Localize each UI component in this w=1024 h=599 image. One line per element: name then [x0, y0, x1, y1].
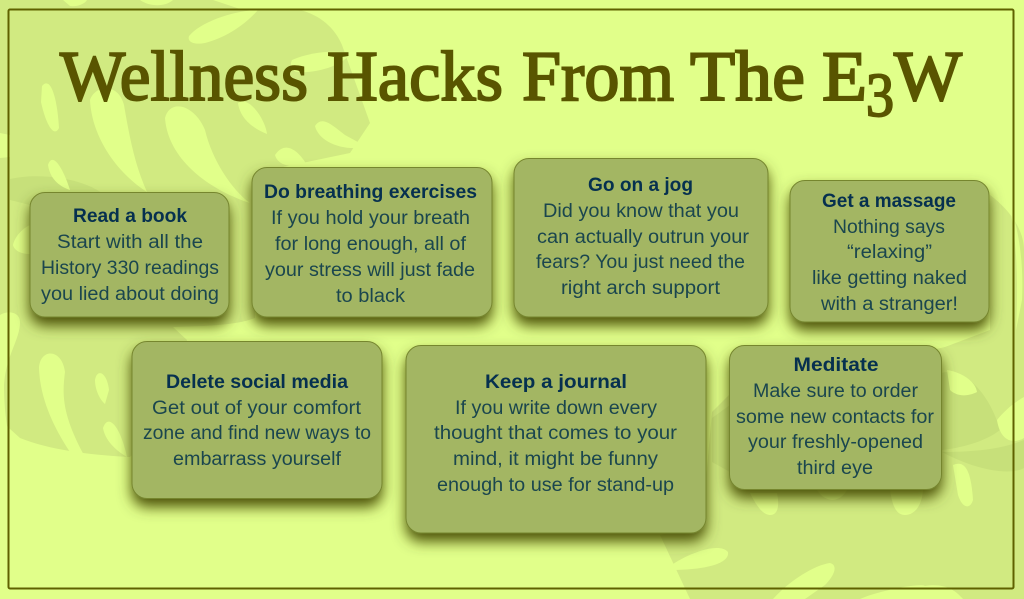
panel: go on a jog: [514, 158, 768, 317]
panel: do breathing exercises: to black: [336, 286, 406, 307]
panel: delete social media: zone and find new ways to: [143, 423, 371, 444]
panel: do breathing exercises: [252, 168, 492, 317]
panel: get a massage: like getting naked: [812, 268, 967, 289]
panel: go on a jog: fears? You just need the: [536, 252, 745, 273]
panel: get a massage: with a stranger!: [820, 294, 958, 315]
panel: go on a jog: right arch support: [561, 278, 721, 299]
title: Hacks: [327, 38, 503, 116]
title: [60, 38, 962, 130]
panel: read a book: [30, 192, 229, 317]
panel: keep a journal: thought that comes to your: [434, 423, 678, 444]
panel: read a book: you lied about doing: [41, 284, 219, 305]
panel: meditate: some new contacts for: [736, 407, 935, 428]
panel: do breathing exercises: If you hold your breath: [271, 208, 470, 229]
panel: delete social media: Get out of your comfort: [152, 398, 362, 419]
panel: get a massage: “relaxing”: [847, 242, 932, 263]
panel: delete social media: [132, 342, 382, 498]
panel: meditate: Make sure to order: [753, 381, 919, 402]
panel: read a book: Start with all the: [57, 232, 203, 253]
panel: meditate: your freshly-opened: [748, 432, 923, 453]
panel: delete social media: Delete social media: [166, 372, 348, 393]
panel: meditate: [730, 346, 942, 490]
panel: get a massage: [790, 180, 989, 322]
title: Wellness: [60, 38, 308, 116]
panel: read a book: Read a book: [73, 206, 187, 227]
panel: go on a jog: Did you know that you: [543, 201, 739, 222]
title: The: [690, 38, 805, 116]
panel: go on a jog: Go on a jog: [588, 175, 693, 196]
panel: keep a journal: mind, it might be funny: [453, 449, 659, 470]
panel: keep a journal: enough to use for stand-up: [437, 475, 674, 496]
panel: keep a journal: Keep a journal: [485, 372, 627, 393]
panel: read a book: History 330 readings: [41, 258, 219, 279]
panel: do breathing exercises: your stress will just fade: [265, 260, 475, 281]
panel: do breathing exercises: Do breathing exercises: [264, 182, 477, 203]
panel: delete social media: embarrass yourself: [173, 449, 342, 470]
panel: keep a journal: If you write down every: [455, 398, 658, 419]
panel: get a massage: Get a massage: [822, 191, 956, 212]
title: E: [822, 38, 867, 116]
panel: meditate: third eye: [797, 458, 873, 479]
panel: do breathing exercises: for long enough, all of: [275, 234, 467, 255]
panel: keep a journal: [406, 346, 706, 533]
panel: go on a jog: can actually outrun your: [537, 227, 750, 248]
panel: get a massage: Nothing says: [833, 217, 945, 238]
panel: meditate: Meditate: [794, 355, 878, 376]
title: 3: [866, 62, 894, 130]
title: From: [522, 38, 674, 116]
title: W: [894, 38, 962, 116]
